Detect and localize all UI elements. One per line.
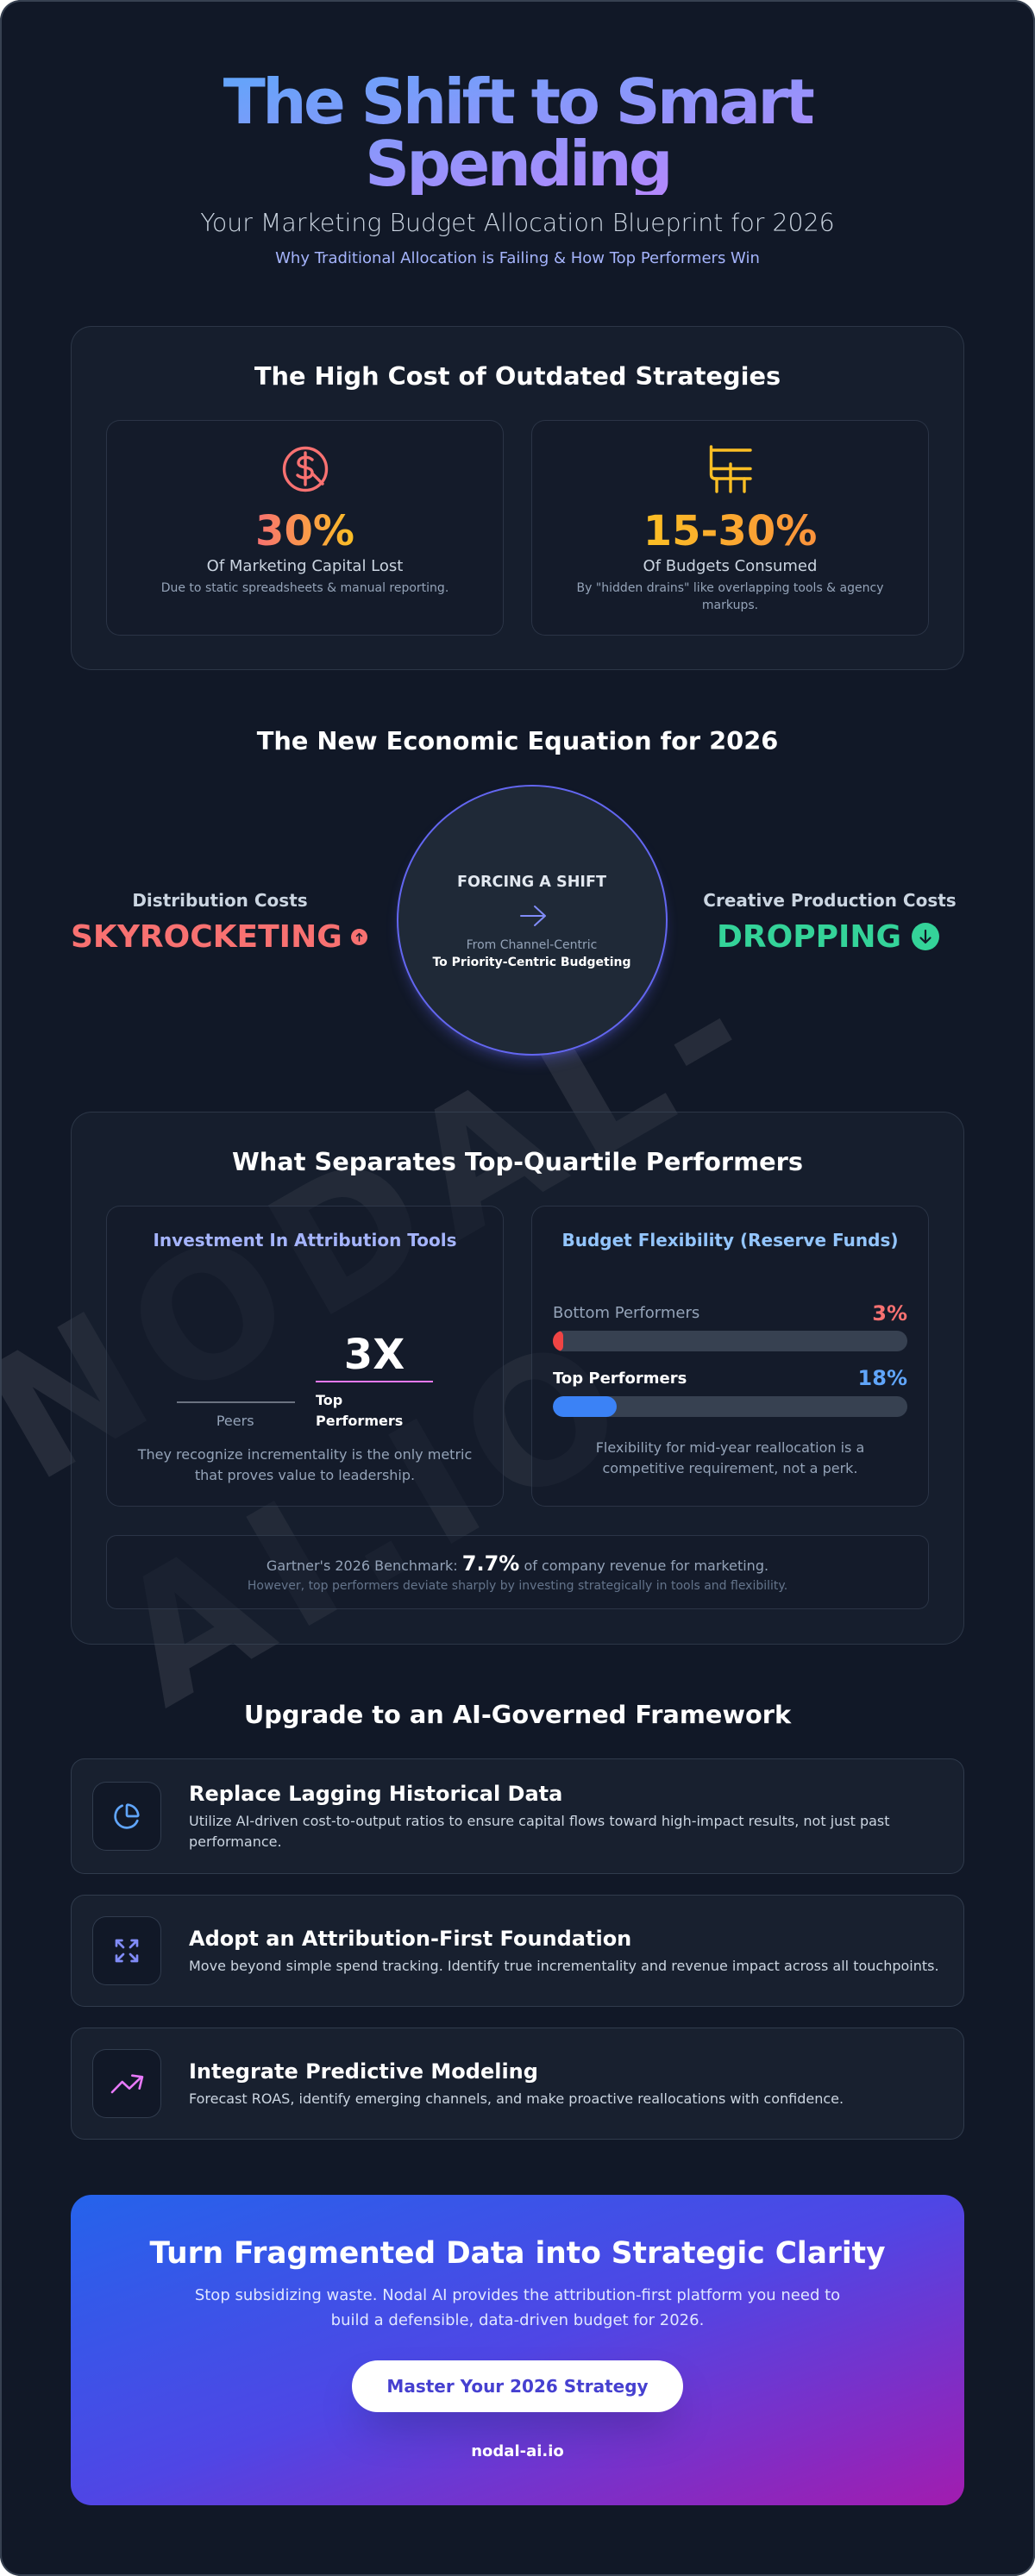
stat label: Of Budgets Consumed	[643, 557, 817, 575]
to text: To Priority-Centric Budgeting	[432, 956, 631, 969]
title: Spending	[365, 128, 670, 200]
stat card: marketing capital lost	[106, 420, 504, 636]
heading: what separates: What Separates Top-Quartile Performers	[232, 1147, 803, 1176]
panel: top-quartile performers	[71, 1112, 964, 1645]
step: predictive modeling	[71, 2028, 964, 2140]
stat card: budgets consumed	[531, 420, 929, 636]
label: bottom performers: Bottom Performers	[553, 1304, 699, 1322]
icon box: pie chart	[92, 1782, 161, 1851]
cta heading: Turn Fragmented Data into Strategic Clarity	[149, 2236, 886, 2271]
stat description: By "hidden drains" like overlapping tools & agency	[576, 581, 883, 595]
step description: performance.	[189, 1833, 282, 1849]
cta description: build a defensible, data-driven budget for 2026.	[331, 2311, 704, 2329]
icon: arrow right	[520, 906, 546, 926]
card note: competitive requirement, not a perk.	[602, 1459, 857, 1476]
icon: glitched chart	[709, 445, 752, 493]
text: AI.IO	[85, 1291, 671, 1745]
card note	[138, 1446, 472, 1483]
card note: that proves value to leadership.	[195, 1467, 415, 1483]
stat: 30%: 30%	[255, 507, 354, 555]
label: top performers: Top Performers	[553, 1369, 687, 1388]
label: peers: Peers	[216, 1413, 254, 1428]
icon: arrow down	[912, 923, 939, 950]
title: The Shift to Smart	[223, 66, 812, 138]
value: 18%: 18%	[858, 1366, 907, 1390]
website: nodal-ai.io	[471, 2442, 564, 2460]
card note	[596, 1438, 864, 1476]
step: attribution-first	[71, 1895, 964, 2007]
card heading: Budget Flexibility (Reserve Funds)	[562, 1230, 899, 1250]
label: creative production costs: Creative Production Costs	[703, 890, 957, 911]
stat: 15-30%: 15-30%	[643, 507, 817, 555]
stat description: markups.	[702, 599, 758, 612]
stat description: Due to static spreadsheets & manual reporting.	[161, 581, 448, 595]
step description: Utilize AI-driven cost-to-output ratios to ensure capital flows toward high-impact results, not just past	[189, 1813, 890, 1828]
step title: Integrate Predictive Modeling	[189, 2059, 538, 2084]
card note: They recognize incrementality is the only metric	[138, 1446, 472, 1463]
bar: 3%	[553, 1331, 907, 1351]
label: top performers: Performers	[316, 1413, 403, 1428]
step description: Forecast ROAS, identify emerging channels, and make proactive reallocations with confidence.	[189, 2090, 844, 2106]
card heading: Investment In Attribution Tools	[153, 1230, 457, 1250]
subtitle: Your Marketing Budget Allocation Blueprint for 2026	[200, 209, 835, 237]
label: top performers	[316, 1392, 403, 1428]
step title: Adopt an Attribution-First Foundation	[189, 1927, 631, 1951]
value: skyrocketing: SKYROCKETING	[71, 919, 342, 954]
value: 3X: 3X	[344, 1331, 405, 1379]
icon box: expand arrows	[92, 1916, 161, 1985]
cta description: Stop subsidizing waste. Nodal AI provides the attribution-first platform you need to	[195, 2286, 840, 2304]
bar: top performers	[316, 1381, 433, 1382]
shift circle	[397, 785, 668, 1056]
heading: high cost: The High Cost of Outdated Strategies	[254, 361, 781, 391]
title	[220, 71, 815, 195]
icon: crossed dollar	[283, 447, 328, 492]
bar: 18%	[553, 1396, 907, 1417]
cta button: Master Your 2026 Strategy	[386, 2376, 649, 2397]
card: attribution tools	[106, 1206, 504, 1507]
benchmark text: Gartner's 2026 Benchmark: 7.7% of company revenue for marketing.	[267, 1551, 768, 1575]
tagline: Why Traditional Allocation is Failing & How Top Performers Win	[275, 249, 760, 267]
card note: Flexibility for mid-year reallocation is a	[596, 1438, 864, 1456]
value: dropping: DROPPING	[717, 919, 901, 954]
circle heading: FORCING A SHIFT	[457, 874, 606, 891]
panel: call to action	[71, 2195, 964, 2505]
stat label: Of Marketing Capital Lost	[207, 557, 403, 575]
benchmark note: However, top performers deviate sharply by investing strategically in tools and flexibility.	[248, 1579, 787, 1593]
card: budget flexibility	[531, 1206, 929, 1507]
icon: arrow up	[351, 929, 367, 945]
step: replace lagging data	[71, 1758, 964, 1874]
heading: new economic equation: The New Economic Equation for 2026	[257, 726, 778, 755]
benchmark callout	[106, 1535, 929, 1609]
panel: high cost of outdated strategies	[71, 326, 964, 670]
step description	[189, 1813, 890, 1849]
chart: peers vs top performers	[177, 1331, 433, 1428]
value: 3%: 3%	[872, 1301, 907, 1326]
icon box: trending up	[92, 2049, 161, 2118]
label: top performers: Top	[316, 1392, 342, 1407]
step title: Replace Lagging Historical Data	[189, 1782, 562, 1806]
stat description	[576, 581, 883, 612]
equation diagram	[71, 785, 957, 1068]
heading: upgrade framework: Upgrade to an AI-Governed Framework	[244, 1700, 791, 1729]
bar: peers	[177, 1401, 295, 1403]
label: distribution costs: Distribution Costs	[132, 890, 308, 911]
from text: From Channel-Centric	[467, 938, 597, 952]
step description: Move beyond simple spend tracking. Identify true incrementality and revenue impact across all touchpoints.	[189, 1958, 939, 1973]
cta description	[195, 2286, 840, 2329]
cta button	[352, 2360, 683, 2412]
